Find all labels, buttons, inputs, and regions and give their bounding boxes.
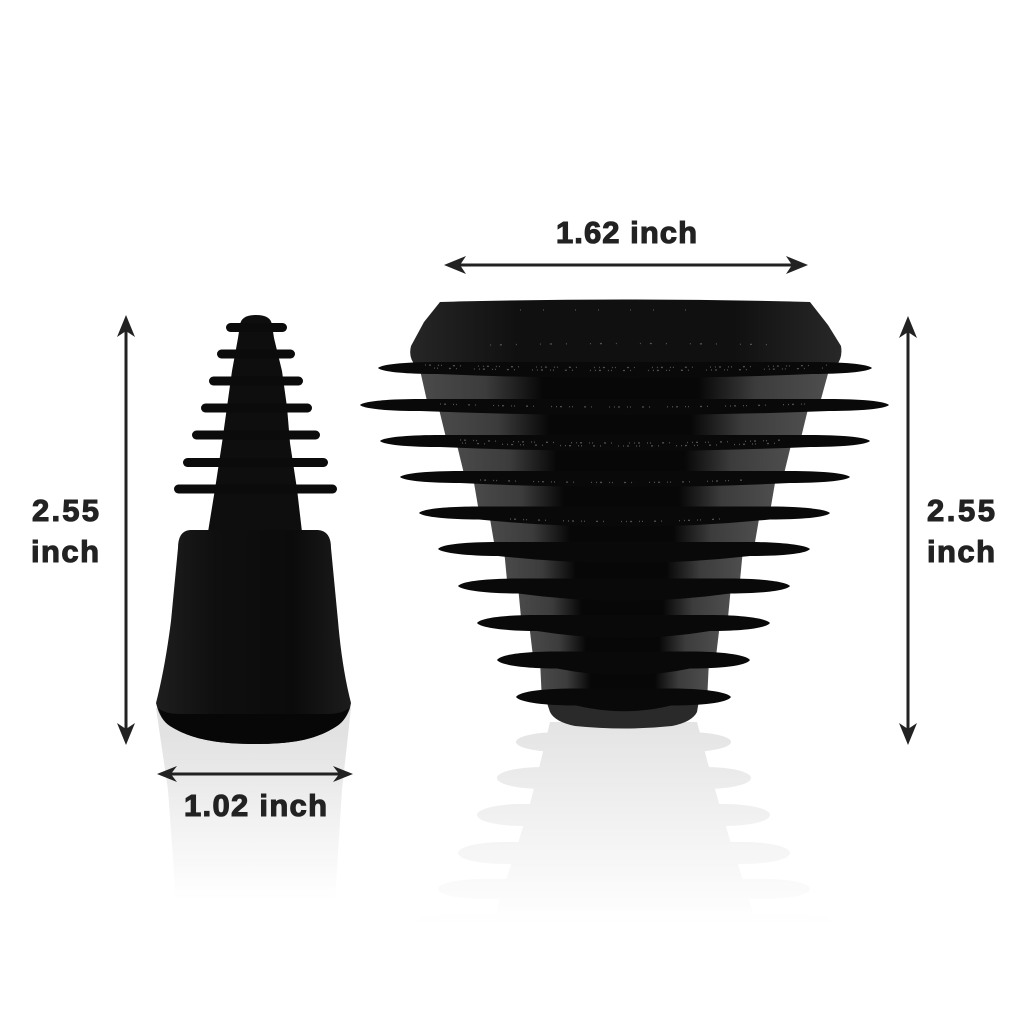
arrow: right height: [899, 316, 917, 745]
reflection: small piece: [156, 708, 351, 900]
small piece fins: [174, 323, 337, 494]
product: large ribbed piece: [360, 300, 889, 728]
arrow: left height: [117, 315, 135, 745]
small piece base: [156, 530, 351, 744]
product: small tapered piece: [156, 315, 351, 744]
label: right height: inch: [927, 534, 995, 569]
label: left height: 2.55: [32, 493, 99, 528]
large piece surface speckle: [425, 310, 830, 522]
label: right height: 2.55: [927, 493, 995, 528]
label: left height: inch: [31, 534, 99, 569]
small piece stem: [208, 315, 302, 532]
large piece body segments: [420, 370, 829, 702]
label: small width: 1.02 inch: [184, 788, 327, 823]
label: large width: 1.62 inch: [556, 215, 697, 250]
large piece bottom tip: [546, 700, 699, 728]
label: left height: [31, 493, 99, 569]
reflection: large piece: [419, 722, 830, 926]
large piece fins: [360, 362, 889, 711]
large piece top cap: [410, 300, 841, 366]
small piece base bevel: [158, 708, 349, 744]
arrow: large piece width: [444, 256, 808, 274]
arrow: small piece width: [157, 766, 353, 782]
label: right height: [927, 493, 995, 569]
